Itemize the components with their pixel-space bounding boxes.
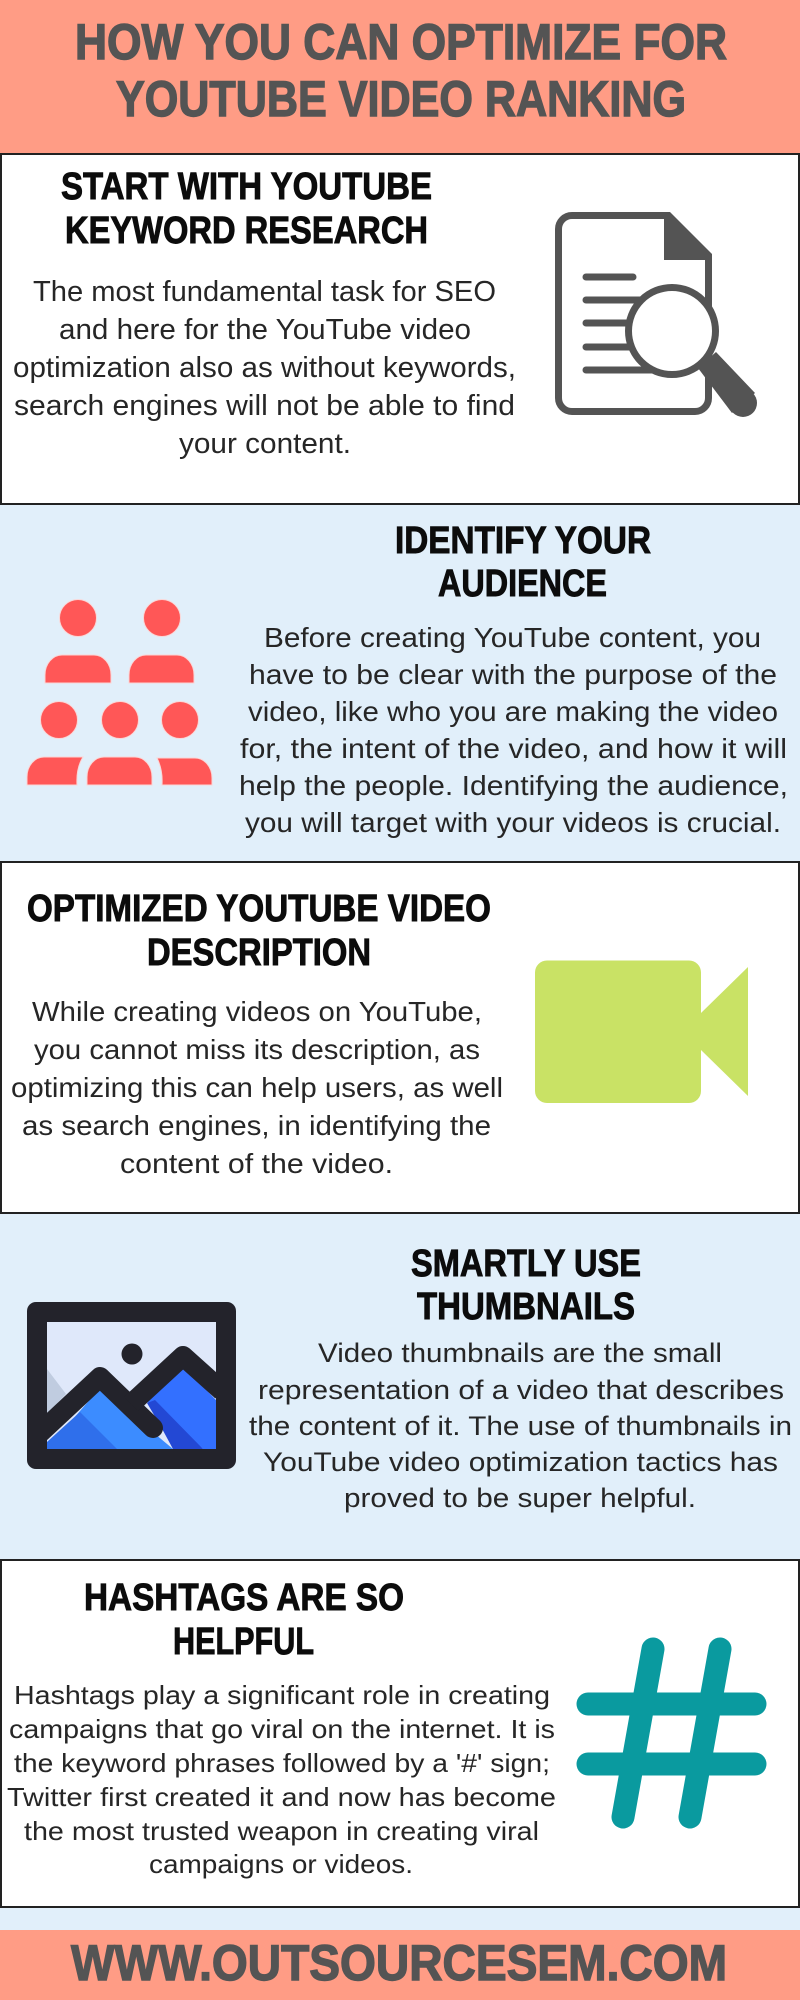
panel: keyword research [1,154,799,504]
text block: video description [11,996,503,1179]
heading: audience: IDENTIFY YOUR [395,520,651,562]
text block: audience: video, like who you are making the video [248,696,778,727]
text block: keyword research: search engines will not be able to find [14,390,515,422]
text block: keyword research: The most fundamental task for SEO [33,276,496,308]
header banner [0,0,800,153]
text block: keyword research: optimization also as without keywords, [13,352,516,384]
icon: hash symbol [588,1649,755,1817]
text block: thumbnails: proved to be super helpful. [344,1483,696,1513]
footer banner [0,1930,800,2000]
heading: thumbnails: THUMBNAILS [417,1286,635,1328]
panel: thumbnails [27,1243,792,1513]
text block: audience: Before creating YouTube content, you [264,622,761,653]
text block: thumbnails [249,1338,792,1513]
text block: hashtags: the keyword phrases followed by a '#' sign; [14,1748,550,1778]
text block: audience [239,622,788,838]
heading: audience [395,520,651,605]
icon: document with magnifier [558,212,757,417]
icon: image thumbnail [27,1302,236,1469]
text block: thumbnails: the content of it. The use of thumbnails in [249,1411,792,1441]
text block: audience: you will target with your videos is crucial. [245,807,781,838]
text block: thumbnails: YouTube video optimization tactics has [263,1447,778,1477]
icon: video camera [535,960,748,1103]
panel: identify your audience [27,520,788,838]
heading: keyword research: KEYWORD RESEARCH [65,210,428,252]
heading: audience: AUDIENCE [438,563,607,605]
text block: hashtags: Twitter first created it and now has become [7,1782,556,1812]
text block: keyword research: your content. [179,428,351,460]
heading: video description: DESCRIPTION [147,932,371,974]
heading: video description [27,888,491,974]
text block: video description: While creating videos on YouTube, [32,996,482,1027]
title [75,14,727,127]
text block: hashtags: the most trusted weapon in creating viral [24,1816,539,1846]
text block: thumbnails: representation of a video that describes [258,1375,784,1405]
text block: hashtags [7,1680,556,1879]
text block: keyword research [13,276,516,460]
heading: video description: OPTIMIZED YOUTUBE VIDEO [27,888,491,930]
text block: video description: you cannot miss its description, as [34,1034,480,1065]
text block: video description: as search engines, in identifying the [22,1110,491,1141]
text block: audience: have to be clear with the purpose of the [249,659,777,690]
title: YOUTUBE VIDEO RANKING [116,71,686,127]
heading: hashtags [84,1577,404,1663]
heading: hashtags: HELPFUL [173,1621,314,1663]
text block: thumbnails: Video thumbnails are the small [318,1338,722,1368]
text block: hashtags: campaigns that go viral on the internet. It is [9,1714,555,1744]
footer website address: WWW.OUTSOURCESEM.COM [71,1935,727,1991]
heading: thumbnails: SMARTLY USE [411,1243,641,1285]
text block: audience: for, the intent of the video, and how it will [240,733,787,764]
title: HOW YOU CAN OPTIMIZE FOR [75,14,727,70]
text block: video description: content of the video. [120,1148,393,1179]
text block: hashtags: Hashtags play a significant role in creating [14,1680,550,1710]
heading: hashtags: HASHTAGS ARE SO [84,1577,404,1619]
text block: hashtags: campaigns or videos. [149,1849,413,1879]
panel: video description [1,862,799,1213]
text block: video description: optimizing this can help users, as well [11,1072,503,1103]
text block: audience: help the people. Identifying the audience, [239,770,788,801]
heading: thumbnails [411,1243,641,1328]
icon: group of people [27,600,212,785]
heading: keyword research: START WITH YOUTUBE [61,166,432,208]
panel: hashtags [1,1560,799,1907]
heading: keyword research [61,166,432,252]
text block: keyword research: and here for the YouTube video [59,314,471,346]
